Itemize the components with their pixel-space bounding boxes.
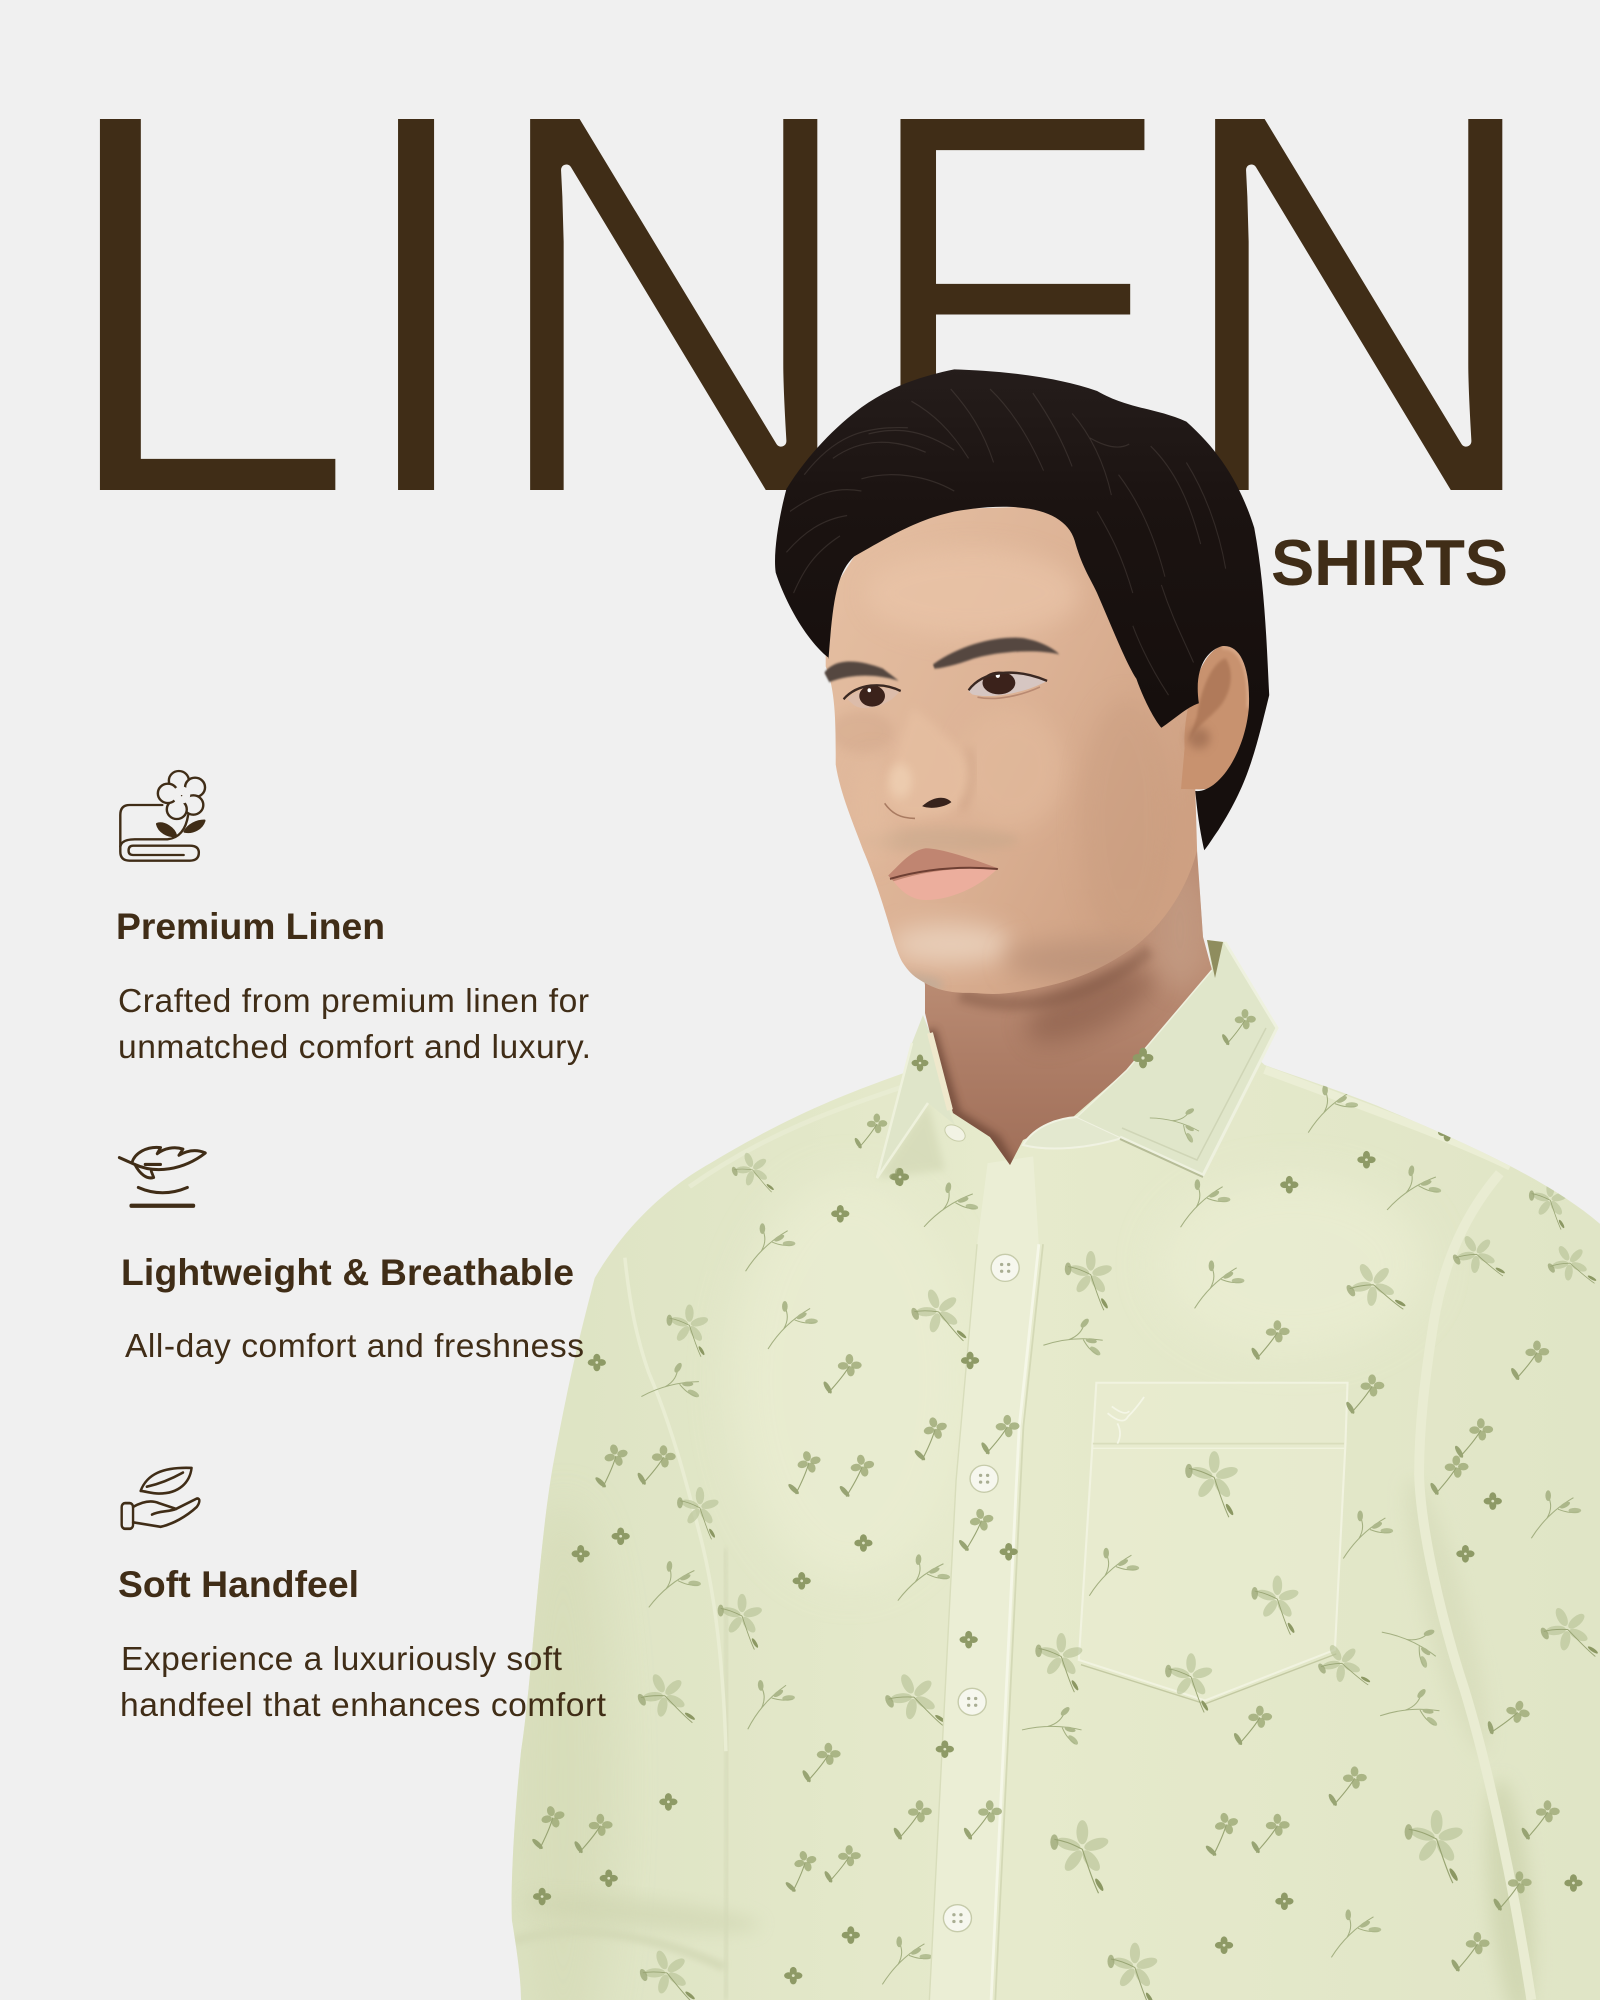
title: LINEN: L [48, 0, 360, 614]
title: LINEN [48, 0, 1551, 614]
neck [900, 850, 1212, 1170]
subtitle: SHIRTS: SHIRTS [1271, 526, 1508, 599]
eyes [844, 671, 1047, 708]
pocket logo [1108, 1397, 1144, 1444]
description [118, 983, 591, 1066]
shirt body [512, 1008, 1600, 2000]
feature: Soft Handfeel [118, 1468, 607, 1724]
collar band [1023, 1117, 1122, 1149]
description: handfeel that enhances comfort [120, 1687, 607, 1724]
ear [1181, 646, 1249, 789]
heading: Soft Handfeel [118, 1563, 359, 1605]
lips [888, 848, 999, 900]
feature: Lightweight and Breathable [119, 1147, 584, 1365]
title: LINEN: N [481, 0, 866, 614]
heading: Lightweight & Breathable [121, 1251, 574, 1293]
description [120, 1641, 607, 1724]
description: Experience a luxuriously soft [121, 1641, 563, 1678]
icon: hand and leaf [122, 1468, 199, 1529]
heading: Premium Linen [116, 905, 385, 947]
shirt shading [514, 1177, 1542, 2000]
icon: towel and flower [120, 771, 205, 861]
floral print [523, 1085, 1600, 2000]
description: All-day comfort and freshness [125, 1328, 584, 1365]
collar [853, 940, 1277, 1186]
pocket [1079, 1383, 1348, 1704]
sleeve and yoke seams [625, 1070, 1531, 2000]
title: LINEN: N [1166, 0, 1551, 614]
hair strands [786, 389, 1226, 695]
hair [775, 369, 1269, 850]
eyebrows [824, 638, 1060, 682]
head [775, 369, 1269, 997]
face [826, 503, 1204, 997]
title: LINEN: I [348, 0, 485, 614]
model figure [512, 369, 1600, 2000]
feature: Premium Linen [116, 771, 591, 1066]
buttons [943, 1254, 1019, 1932]
shadow under left collar [877, 1103, 945, 1178]
nose [884, 707, 972, 818]
placket [929, 1156, 1043, 2000]
description: unmatched comfort and luxury. [118, 1029, 591, 1066]
icon: feather [119, 1147, 205, 1206]
title: LINEN: E [856, 0, 1180, 614]
description: Crafted from premium linen for [118, 983, 589, 1020]
